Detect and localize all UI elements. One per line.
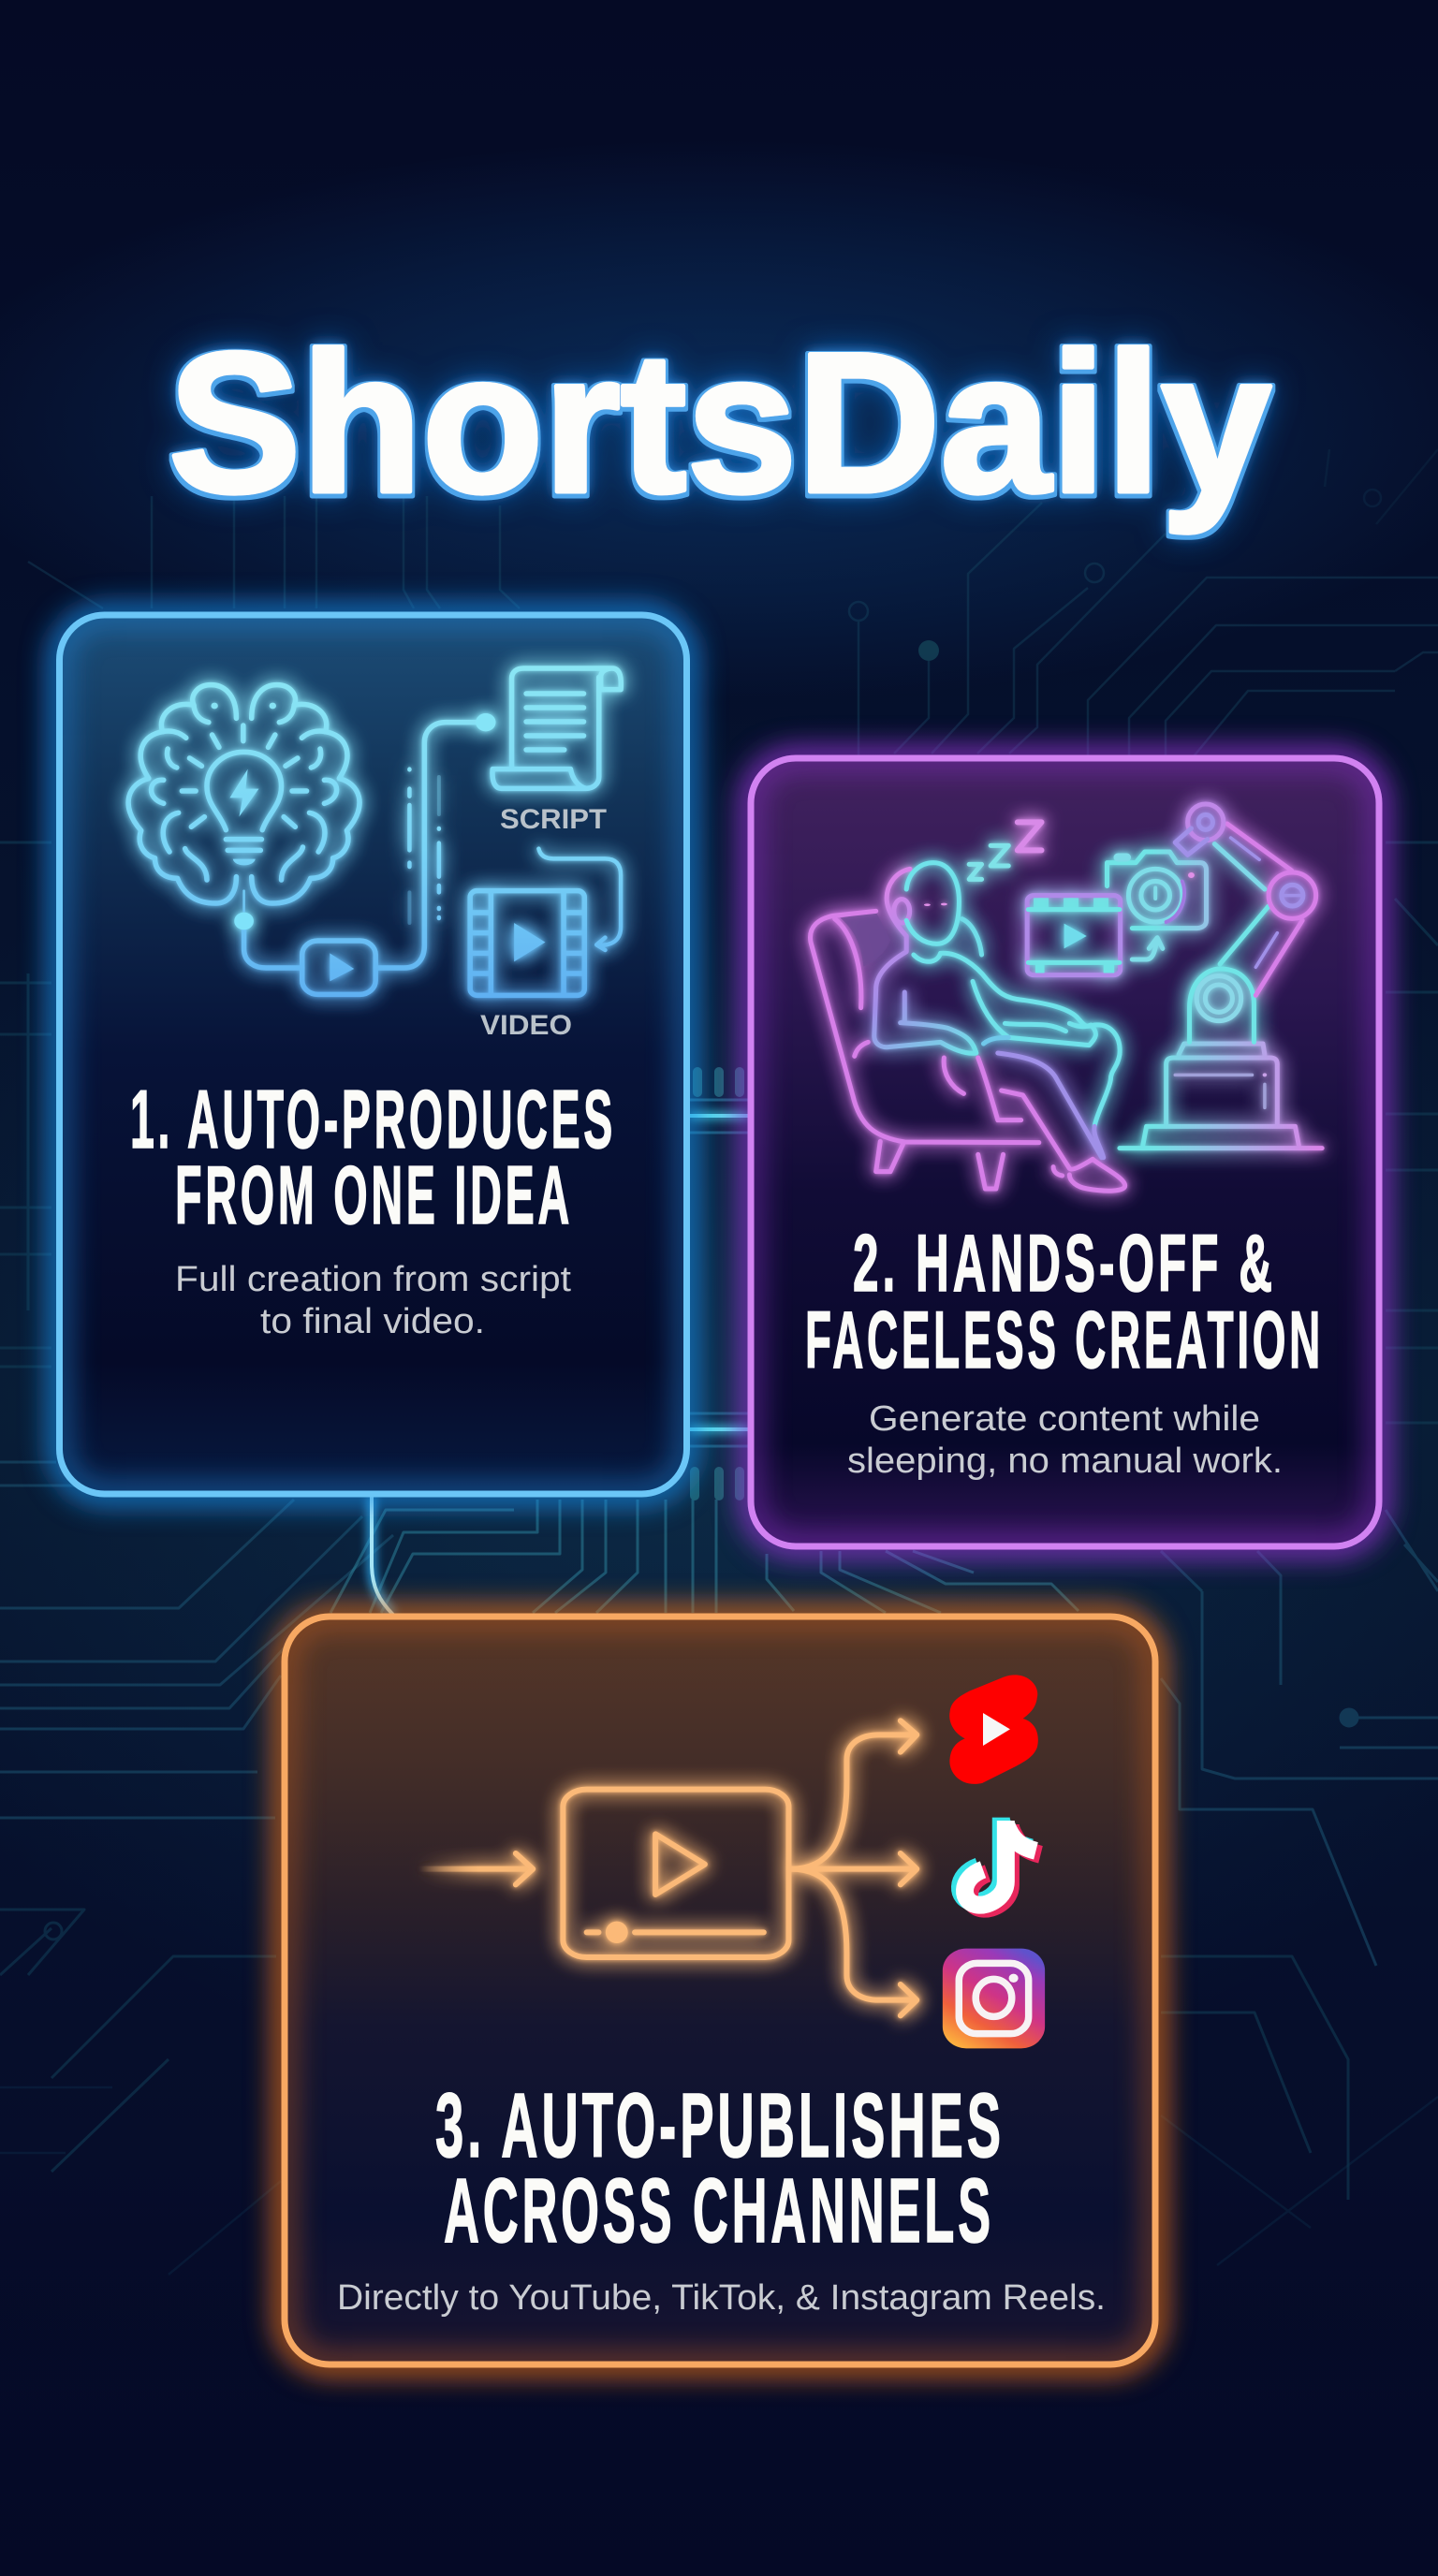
heading: auto-produces from one idea	[130, 1073, 616, 1241]
robot arm	[1120, 804, 1322, 1149]
description: card 2	[847, 1399, 1283, 1481]
heading: auto-produces from one idea: FROM ONE IDEA	[175, 1149, 573, 1241]
panel: card 1 auto-produces	[60, 615, 687, 1494]
label: script: SCRIPT	[500, 804, 607, 835]
heading: auto-produces from one idea: 1. AUTO-PRODUCES	[130, 1073, 616, 1165]
panel: card 2 hands-off	[751, 758, 1379, 1546]
panel: card 3 auto-publishes	[285, 1617, 1155, 2364]
icon: video distributing to channels	[419, 1720, 917, 2015]
heading: hands-off and faceless creation	[805, 1219, 1324, 1385]
heading: auto-publishes across channels: ACROSS CHANNELS	[444, 2159, 994, 2261]
description: card 3: Directly to YouTube, TikTok, & Instagram Reels.	[337, 2278, 1106, 2318]
heading: auto-publishes across channels: 3. AUTO-PUBLISHES	[435, 2074, 1005, 2176]
description: card 2: Generate content while	[869, 1399, 1260, 1439]
person	[874, 863, 1125, 1191]
bright connector traces between cards	[689, 1072, 749, 1496]
zzz	[1018, 822, 1041, 850]
circuit traces background	[0, 449, 1438, 2275]
chair	[811, 911, 1039, 1189]
heading: auto-publishes across channels	[435, 2074, 1005, 2261]
label: video: VIDEO	[480, 1010, 572, 1041]
film clip	[1027, 896, 1121, 975]
description: card 2: sleeping, no manual work.	[847, 1442, 1283, 1481]
icon: brain, script and video workflow	[128, 668, 621, 995]
description: card 1: Full creation from script	[175, 1260, 571, 1299]
camera	[1108, 852, 1207, 959]
title: ShortsDaily	[169, 312, 1271, 534]
icon: tiktok	[960, 1818, 1041, 1909]
description: card 1	[175, 1260, 571, 1341]
icon: instagram	[943, 1949, 1045, 2048]
connector: card 1 to card 3	[372, 1496, 393, 1615]
icon: youtube shorts	[949, 1675, 1038, 1784]
description: card 1: to final video.	[260, 1302, 485, 1341]
icon: sleeping person and robot arm	[811, 804, 1322, 1191]
